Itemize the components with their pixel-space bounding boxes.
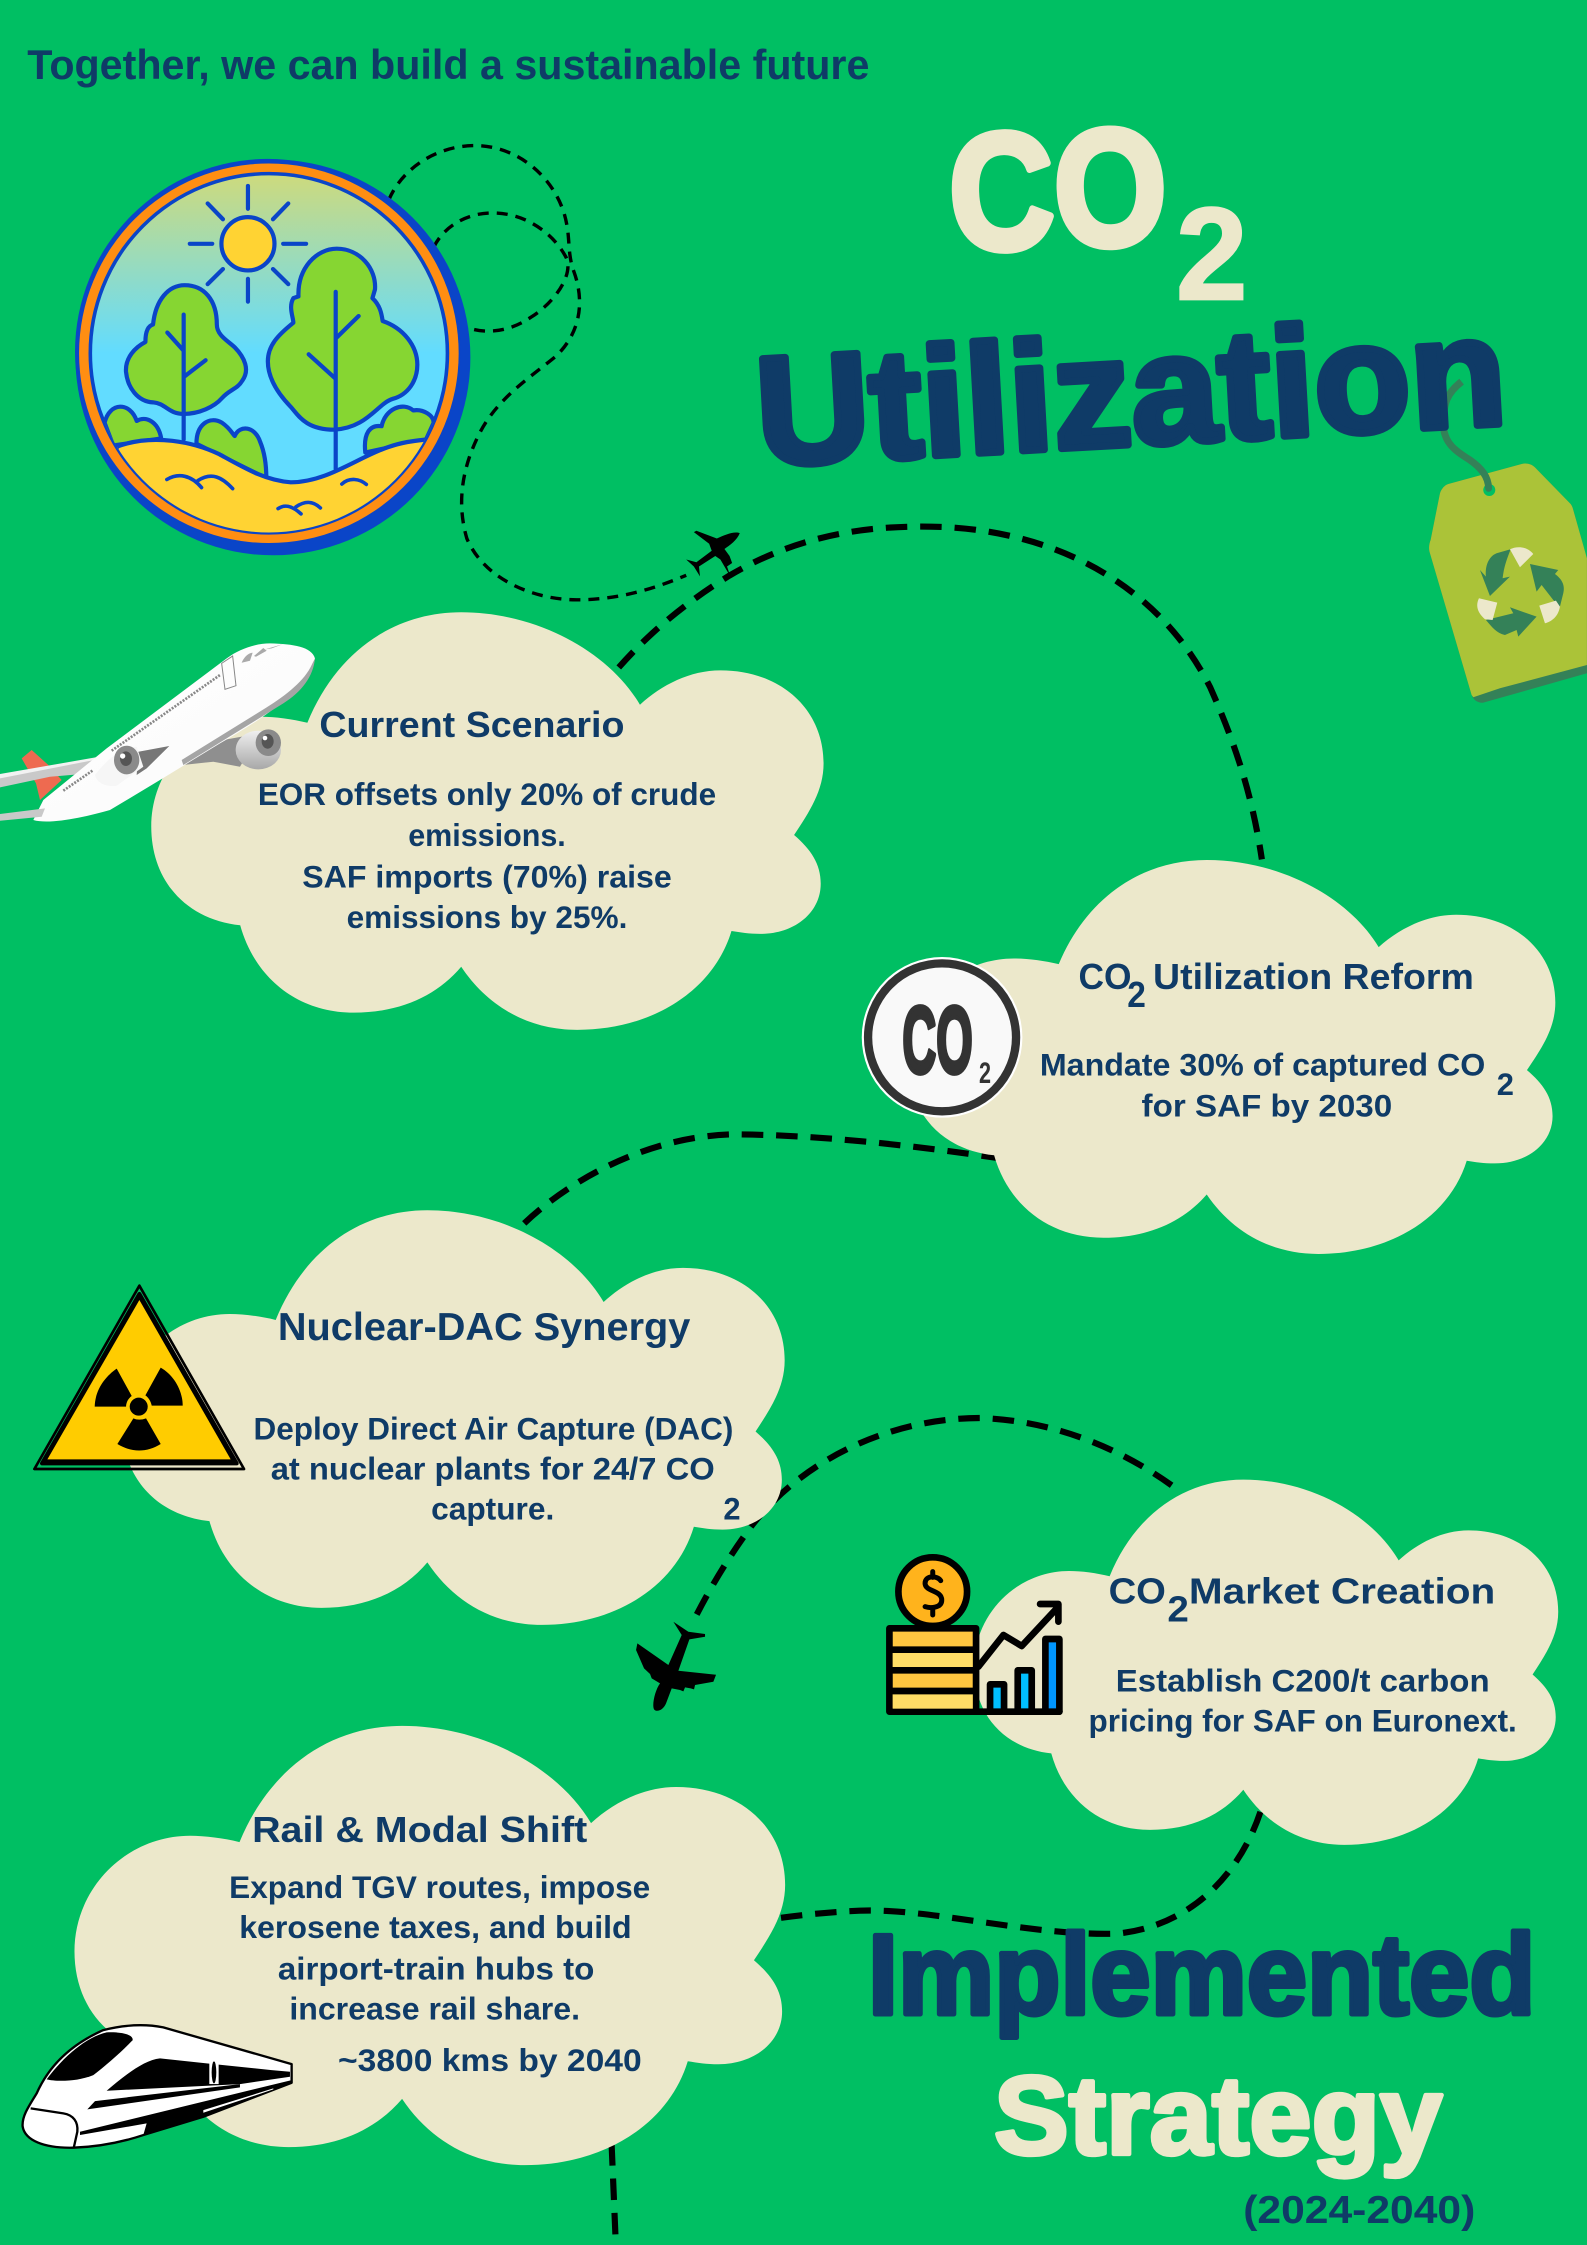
cloud shape [909, 860, 1555, 1254]
dashed flight loops [389, 146, 686, 600]
body text: capture. [431, 1491, 554, 1527]
title: Utilization: Utilization [751, 284, 1510, 498]
heading: Utilization Reform [1153, 957, 1474, 997]
cloud shape [151, 612, 824, 1030]
icon: radiation warning sign [34, 1286, 244, 1469]
icon: coins and growth chart [889, 1557, 1059, 1712]
flight path: market to rail [781, 1812, 1260, 1934]
cloud shape [974, 1480, 1558, 1845]
body text: kerosene taxes, and build [239, 1909, 632, 1945]
heading: CO [1079, 957, 1132, 997]
icon: landscape globe badge [75, 159, 470, 556]
body text [1089, 1663, 1517, 1739]
icon: CO2 badge: CO [902, 987, 973, 1093]
body text: increase rail share. [289, 1991, 580, 2027]
heading: 2 [1127, 975, 1146, 1015]
heading: Market Creation [1189, 1571, 1495, 1611]
body text: SAF imports (70%) raise [302, 858, 672, 894]
body text: EOR offsets only 20% of crude [258, 776, 716, 812]
title: CO2 [946, 94, 1248, 327]
flight path: current scenario to reform [619, 527, 1262, 859]
icon: recycling hang tag [1429, 382, 1587, 703]
body text: 2 [723, 1491, 741, 1527]
body text: ~3800 kms by 2040 [338, 2042, 642, 2078]
body text [254, 1410, 741, 1527]
body text: airport-train hubs to [278, 1950, 594, 1986]
flight path: rail to bottom [612, 2144, 616, 2245]
heading: CO [1109, 1571, 1166, 1611]
panel: nuclear-DAC synergy [34, 1210, 785, 1625]
date range: (2024-2040) [1243, 2189, 1475, 2232]
panel: current scenario [0, 612, 824, 1030]
icon: CO2 badge: 2 [979, 1057, 991, 1090]
title: CO2: 2 [1176, 180, 1248, 327]
heading: Rail & Modal Shift [252, 1810, 587, 1850]
cloud shape [74, 1726, 785, 2165]
tagline: Together, we can build a sustainable future [27, 41, 869, 88]
title: Implemented: Implemented [868, 1911, 1535, 2039]
panel: CO2 market creation [889, 1480, 1558, 1845]
icon: airplane [0, 643, 315, 822]
body text: pricing for SAF on Euronext. [1089, 1703, 1517, 1739]
heading: Nuclear-DAC Synergy [278, 1306, 691, 1349]
body text: Expand TGV routes, impose [229, 1869, 650, 1905]
body text: emissions. [408, 817, 566, 853]
panel: CO2 utilization reform [862, 860, 1555, 1254]
icon: CO2 badge [862, 957, 1022, 1118]
flight path: reform to nuclear [518, 1134, 1003, 1229]
body text: Mandate 30% of captured CO [1040, 1047, 1485, 1083]
body text [1040, 1047, 1514, 1123]
body text: 2 [1497, 1066, 1514, 1102]
title: CO2: CO [946, 94, 1170, 287]
heading: Current Scenario [319, 705, 624, 745]
icon: black plane [636, 1622, 716, 1711]
icon: high-speed train [23, 2025, 292, 2148]
body text: emissions by 25%. [347, 899, 627, 935]
heading [1079, 957, 1474, 1015]
body text: at nuclear plants for 24/7 CO [271, 1451, 715, 1487]
heading [1109, 1571, 1495, 1629]
panel: rail and modal shift [23, 1726, 785, 2165]
heading: 2 [1167, 1589, 1189, 1629]
icon: small plane on flight path [686, 531, 740, 577]
body text [258, 776, 716, 935]
body text: for SAF by 2030 [1142, 1087, 1392, 1123]
flight path: nuclear to market [693, 1418, 1172, 1621]
cloud shape [122, 1210, 785, 1625]
body text [229, 1869, 650, 2078]
body text: Establish C200/t carbon [1116, 1663, 1490, 1699]
title: Strategy: Strategy [994, 2053, 1442, 2178]
body text: Deploy Direct Air Capture (DAC) [254, 1410, 733, 1446]
